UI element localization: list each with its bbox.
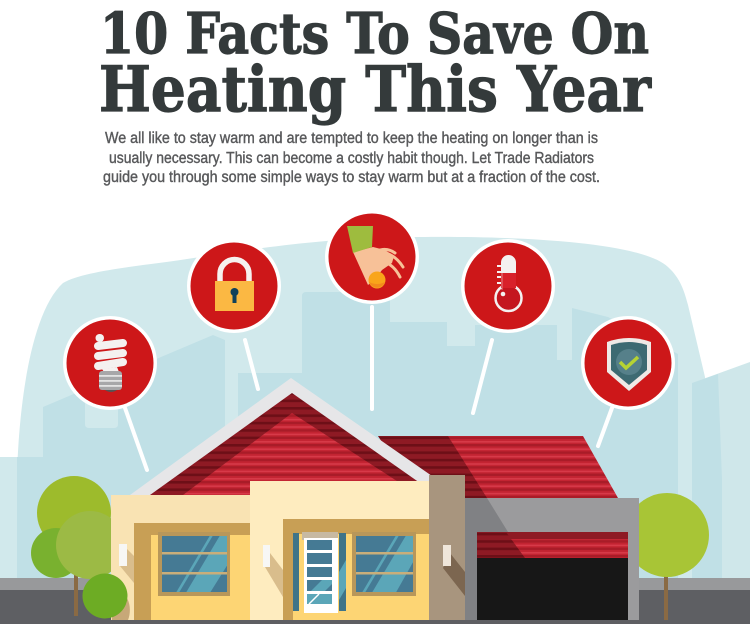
icon: padlock: [187, 239, 281, 333]
tree: left: [31, 476, 124, 616]
main gable roof: [130, 378, 432, 495]
wall lamp: left: [119, 544, 127, 566]
garage door: [477, 532, 628, 620]
connector lines: [125, 307, 612, 470]
city skyline background: [0, 237, 750, 580]
pavement strip: [111, 620, 639, 624]
icon: light bulb: [63, 316, 157, 410]
front door: [293, 532, 346, 613]
icon: hand dropping coin: [325, 210, 419, 304]
tree: right: [625, 493, 709, 620]
window: centre: [352, 532, 416, 596]
wall lamp: pillar: [443, 545, 451, 566]
intro text: [103, 130, 600, 186]
title: 10 Facts To Save On: [100, 1, 649, 67]
icon: thermometer: [461, 239, 555, 333]
wall lamp: centre: [263, 545, 270, 567]
house: pillar: [429, 475, 465, 620]
intro text: guide you through some simple ways to stay warm but at a fraction of the cost.: [103, 169, 600, 186]
title: Heating This Year: [99, 52, 652, 126]
garage roof: [378, 436, 618, 498]
intro text: We all like to stay warm and are tempted to keep the heating on longer than is: [105, 130, 598, 147]
window: left: [158, 532, 230, 596]
garage: [465, 498, 639, 620]
road: [0, 578, 750, 624]
icon: shield: [581, 316, 675, 410]
small green shrub: [82, 574, 130, 620]
house: centre block: [250, 481, 430, 620]
intro text: usually necessary. This can become a costly habit though. Let Trade Radiators: [109, 150, 594, 167]
house: left wing: [111, 495, 250, 620]
title: [99, 1, 652, 126]
